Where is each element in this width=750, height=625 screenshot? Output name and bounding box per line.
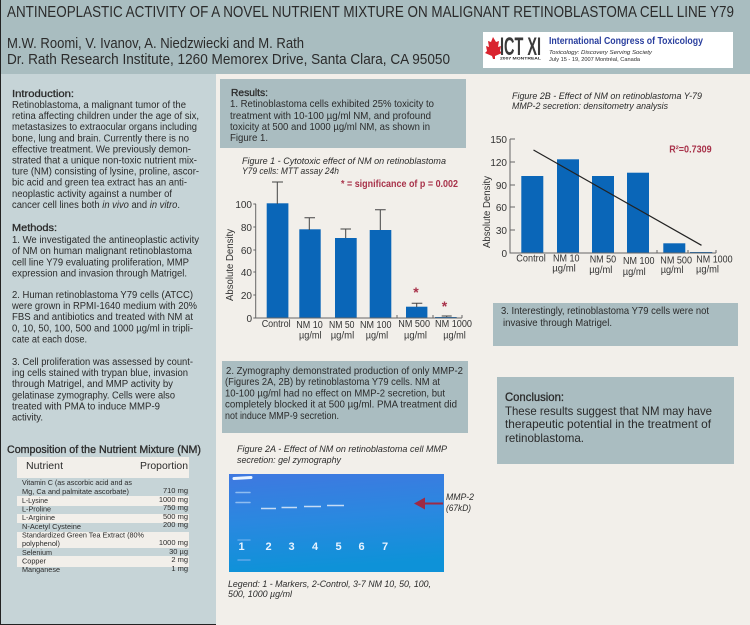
r-squared value: R²=0.7309: [669, 143, 712, 155]
lane numbers: 6: [358, 541, 365, 553]
logo: International Congress of Toxicology: July 15 - 19, 2007 Montréal, Canada: [549, 57, 640, 63]
panel: conclusion: retinoblastoma.: [505, 431, 584, 445]
text block: introduction: Introduction:: [12, 89, 74, 100]
category labels: NM 50: [590, 254, 617, 266]
header band: [0, 0, 750, 74]
trend line: [534, 150, 702, 245]
text block: introduction: cancer cell lines both in vivo and in vitro.: [12, 200, 180, 211]
category labels: Control: [262, 319, 291, 330]
category labels: NM 1000: [696, 255, 733, 266]
logo: International Congress of Toxicology: International Congress of Toxicology: [549, 36, 703, 47]
figure 1 caption: [242, 156, 446, 177]
bar chart: figure 2B: 150: [490, 135, 507, 146]
text block: introduction: neoplastic activity against a number of: [12, 189, 172, 200]
y axis label: Absolute Density: [482, 176, 493, 248]
panel: results 3: invasive through Matrigel.: [503, 317, 612, 329]
bars: [267, 203, 457, 318]
category labels: µg/ml: [299, 330, 322, 342]
panel: conclusion: Conclusion:: [505, 390, 564, 404]
lane numbers: [238, 541, 388, 553]
lane numbers: 5: [335, 541, 342, 553]
panel: results 2: [222, 361, 468, 433]
bar chart: figure 2B: 0: [501, 249, 507, 260]
category labels: NM 500: [660, 255, 692, 266]
figure 1 caption: Figure 1 - Cytotoxic effect of NM on retinoblastoma: [242, 156, 446, 167]
text block: introduction: strated that a unique non-toxic nutrient mix-: [12, 156, 197, 166]
category labels: [516, 254, 733, 278]
text block: methods: treated with PMA to induce MMP-9: [12, 402, 160, 412]
figure 2A caption: secretion: gel zymography: [237, 455, 342, 466]
bar chart: figure 1: 0: [246, 314, 252, 325]
MMP-2 label: [446, 492, 475, 514]
table: nutrient mixture composition: polyphenol): [22, 539, 60, 548]
text block: methods: activity.: [12, 412, 43, 424]
text block: methods: of NM on human malignant retinoblastoma: [12, 246, 192, 257]
text block: methods: Methods:: [12, 223, 57, 234]
table: nutrient mixture composition: Proportion: [140, 460, 188, 472]
bar chart: figure 1: 20: [241, 291, 252, 302]
significance stars: [413, 284, 448, 314]
logo: International Congress of Toxicology: 2007 MONTREAL: [500, 56, 542, 60]
bar chart: figure 2B: 30: [496, 226, 507, 237]
text block: methods: cell line Y79 evaluating proliferation, MMP: [12, 258, 189, 268]
category labels: µg/ml: [366, 330, 388, 342]
authors and affiliation: M.W. Roomi, V. Ivanov, A. Niedzwiecki and M. Rath: [7, 36, 304, 52]
category labels: µg/ml: [696, 265, 719, 276]
significance note: * = significance of p = 0.002: [341, 178, 458, 190]
text block: introduction: bic acid and green tea extract has an anti-: [12, 178, 187, 188]
text block: methods: cate at each dose.: [12, 334, 87, 346]
figure 2A caption: Figure 2A - Effect of NM on retinoblastoma cell MMP: [237, 444, 448, 455]
panel: results 2: not induce MMP-9 secretion.: [225, 410, 339, 422]
category labels: µg/ml: [552, 264, 576, 274]
table: nutrient mixture composition: 710 mg: [163, 486, 188, 495]
panel: results 1: treatment with 10-100 µg/ml NM, and profound: [230, 110, 431, 122]
panel: results 3: 3. Interestingly, retinoblastoma Y79 cells were not: [501, 305, 709, 317]
table: nutrient mixture composition: Standardized Green Tea Extract (80%: [22, 530, 144, 540]
bar chart: figure 1: [225, 182, 472, 342]
panel: left column: [0, 0, 216, 625]
table: nutrient mixture composition: Vitamin C (as ascorbic acid and as: [22, 478, 132, 487]
panel: conclusion: [497, 377, 734, 464]
axes: [253, 204, 462, 318]
category labels: NM 100: [623, 256, 655, 267]
bar chart: figure 2B: 120: [490, 158, 507, 169]
logo: International Congress of Toxicology: ICT XI: [500, 33, 541, 61]
bar chart: figure 1: 60: [241, 246, 252, 257]
gel legend: 500, 1000 µg/ml: [228, 589, 293, 600]
gel zymography image: [229, 474, 444, 572]
category labels: µg/ml: [331, 330, 354, 342]
heading: composition of the nutrient mixture: Composition of the Nutrient Mixture (NM): [7, 444, 201, 456]
authors and affiliation: Dr. Rath Research Institute, 1260 Memorex Drive, Santa Clara, CA 95050: [7, 52, 450, 68]
panel: results 2: completely blocked it at 500 µg/ml. PMA treatment did: [225, 398, 457, 410]
text block: methods: 0, 10, 50, 100, 500 and 1000 µg/ml in tripli-: [12, 324, 193, 334]
text block: methods: 3. Cell proliferation was assessed by count-: [12, 357, 193, 368]
bar chart: figure 1: 80: [241, 223, 252, 234]
text block: introduction: retina affecting children under the age of six,: [12, 111, 199, 122]
table: nutrient mixture composition: Selenium: [22, 548, 52, 557]
text block: methods: through Matrigel, and MMP activity by: [12, 379, 173, 390]
text block: introduction: [12, 89, 199, 211]
table: nutrient mixture composition: [17, 457, 189, 574]
category labels: NM 100: [360, 320, 392, 331]
text block: introduction: effective treatment. We previously demon-: [12, 144, 191, 156]
panel: results 1: toxicity at 500 and 1000 µg/ml NM, as shown in: [230, 121, 430, 133]
figure 2B caption: Figure 2B - Effect of NM on retinoblastoma Y-79: [512, 91, 703, 102]
y axis label: Absolute Density: [225, 229, 236, 301]
table: nutrient mixture composition: 30 µg: [169, 547, 188, 556]
significance stars: *: [413, 284, 419, 300]
text block: methods: 2. Human retinoblastoma Y79 cells (ATCC): [12, 290, 193, 301]
text block: methods: 1. We investigated the antineoplastic activity: [12, 235, 199, 246]
category labels: [262, 319, 472, 342]
panel: results 1: Results:: [231, 87, 268, 99]
text block: methods: were grown in RPMI-1640 medium with 20%: [11, 301, 197, 312]
bar chart: figure 2B: 90: [496, 181, 507, 192]
table: nutrient mixture composition: 1000 mg: [159, 495, 188, 504]
table: nutrient mixture composition: 750 mg: [163, 503, 188, 512]
category labels: µg/ml: [589, 265, 612, 276]
text block: methods: gelatinase zymography. Cells were also: [12, 390, 175, 402]
panel: results 2: (Figures 2A, 2B) by retinoblastoma Y79 cells. NM at: [225, 376, 440, 388]
panel: results 3: [493, 303, 738, 346]
category labels: NM 1000: [435, 319, 472, 330]
text block: methods: [11, 223, 199, 424]
figure 2B caption: [512, 91, 703, 112]
panel: results 1: Figure 1.: [230, 132, 268, 144]
lane numbers: 3: [288, 541, 295, 553]
category labels: µg/ml: [443, 330, 466, 342]
text block: introduction: bone, lung and brain. Currently there is no: [12, 134, 189, 144]
figure 2A caption: [237, 444, 448, 466]
category labels: µg/ml: [404, 330, 427, 342]
text block: methods: ing cells stained with trypan blue, invasion: [12, 368, 188, 379]
table: nutrient mixture composition: 1 mg: [171, 564, 188, 573]
gel legend: Legend: 1 - Markers, 2-Control, 3-7 NM 10, 50, 100,: [228, 579, 431, 590]
table: nutrient mixture composition: L-Lysine: [22, 496, 48, 505]
category labels: Control: [516, 254, 546, 264]
text block: introduction: metastasizes to extraocular organs including: [12, 122, 197, 133]
lane numbers: 7: [382, 541, 388, 553]
authors and affiliation: [7, 36, 450, 68]
category labels: NM 50: [329, 320, 355, 331]
significance stars: *: [442, 298, 448, 314]
panel: conclusion: These results suggest that NM may have: [505, 404, 712, 418]
logo: International Congress of Toxicology: Toxicology: Discovery Serving Society: [549, 50, 653, 56]
category labels: NM 10: [296, 320, 323, 331]
table: nutrient mixture composition: 200 mg: [163, 520, 188, 529]
text block: methods: FBS and antibiotics and treated with NM at: [12, 312, 193, 323]
figure 1 caption: Y79 cells: MTT assay 24h: [242, 166, 339, 177]
table: nutrient mixture composition: 1000 mg: [159, 538, 188, 547]
marker bands: [234, 478, 251, 560]
text block: introduction: Retinoblastoma, a malignant tumor of the: [12, 100, 186, 111]
text block: methods: expression and invasion through Matrigel.: [12, 268, 187, 280]
error bars: [272, 182, 452, 317]
table: nutrient mixture composition: Manganese: [22, 565, 60, 574]
figure 2B caption: MMP-2 secretion: densitometry analysis: [512, 101, 668, 112]
axes: [510, 139, 716, 253]
arrow: MMP-2 band marker: [414, 498, 443, 510]
lane numbers: 1: [238, 541, 245, 553]
category labels: µg/ml: [623, 267, 646, 278]
panel: results 1: [220, 79, 466, 148]
category labels: NM 500: [398, 319, 430, 330]
panel: results 2: 2. Zymography demonstrated production of only MMP-2: [226, 365, 463, 377]
table: nutrient mixture composition: L-Arginine: [22, 513, 55, 522]
icon: maple leaf: [485, 37, 502, 59]
bar chart: figure 1: 100: [235, 200, 252, 211]
gel legend: [228, 579, 431, 600]
table: nutrient mixture composition: 500 mg: [163, 512, 188, 521]
lane numbers: 2: [265, 541, 272, 553]
MMP-2 label: (67kD): [446, 503, 471, 514]
sample bands: [261, 506, 344, 508]
category labels: µg/ml: [661, 265, 683, 276]
category labels: NM 10: [553, 254, 580, 264]
table: nutrient mixture composition: Copper: [22, 556, 46, 566]
table: nutrient mixture composition: Mg, Ca and palmitate ascorbate): [22, 487, 129, 496]
bars: [521, 159, 712, 253]
panel: results 1: 1. Retinoblastoma cells exhibited 25% toxicity to: [230, 98, 434, 110]
table: nutrient mixture composition: Nutrient: [26, 460, 63, 472]
lane numbers: 4: [312, 541, 319, 553]
bar chart: figure 2B: [482, 135, 733, 278]
panel: results 2: 10-100 µg/ml had no effect on MMP-2 secretion, but: [225, 388, 445, 400]
bar chart: figure 1: 40: [241, 268, 252, 279]
bar chart: figure 2B: 60: [496, 203, 507, 214]
MMP-2 label: MMP-2: [446, 492, 475, 503]
table: nutrient mixture composition: L-Proline: [22, 504, 51, 514]
table: nutrient mixture composition: N-Acetyl Cysteine: [22, 522, 81, 531]
panel: conclusion: therapeutic potential in the treatment of: [505, 417, 712, 431]
table: nutrient mixture composition: 2 mg: [171, 555, 188, 564]
text block: introduction: ture (NM) consisting of lysine, proline, ascor-: [12, 166, 199, 178]
logo: International Congress of Toxicology: [483, 32, 733, 68]
